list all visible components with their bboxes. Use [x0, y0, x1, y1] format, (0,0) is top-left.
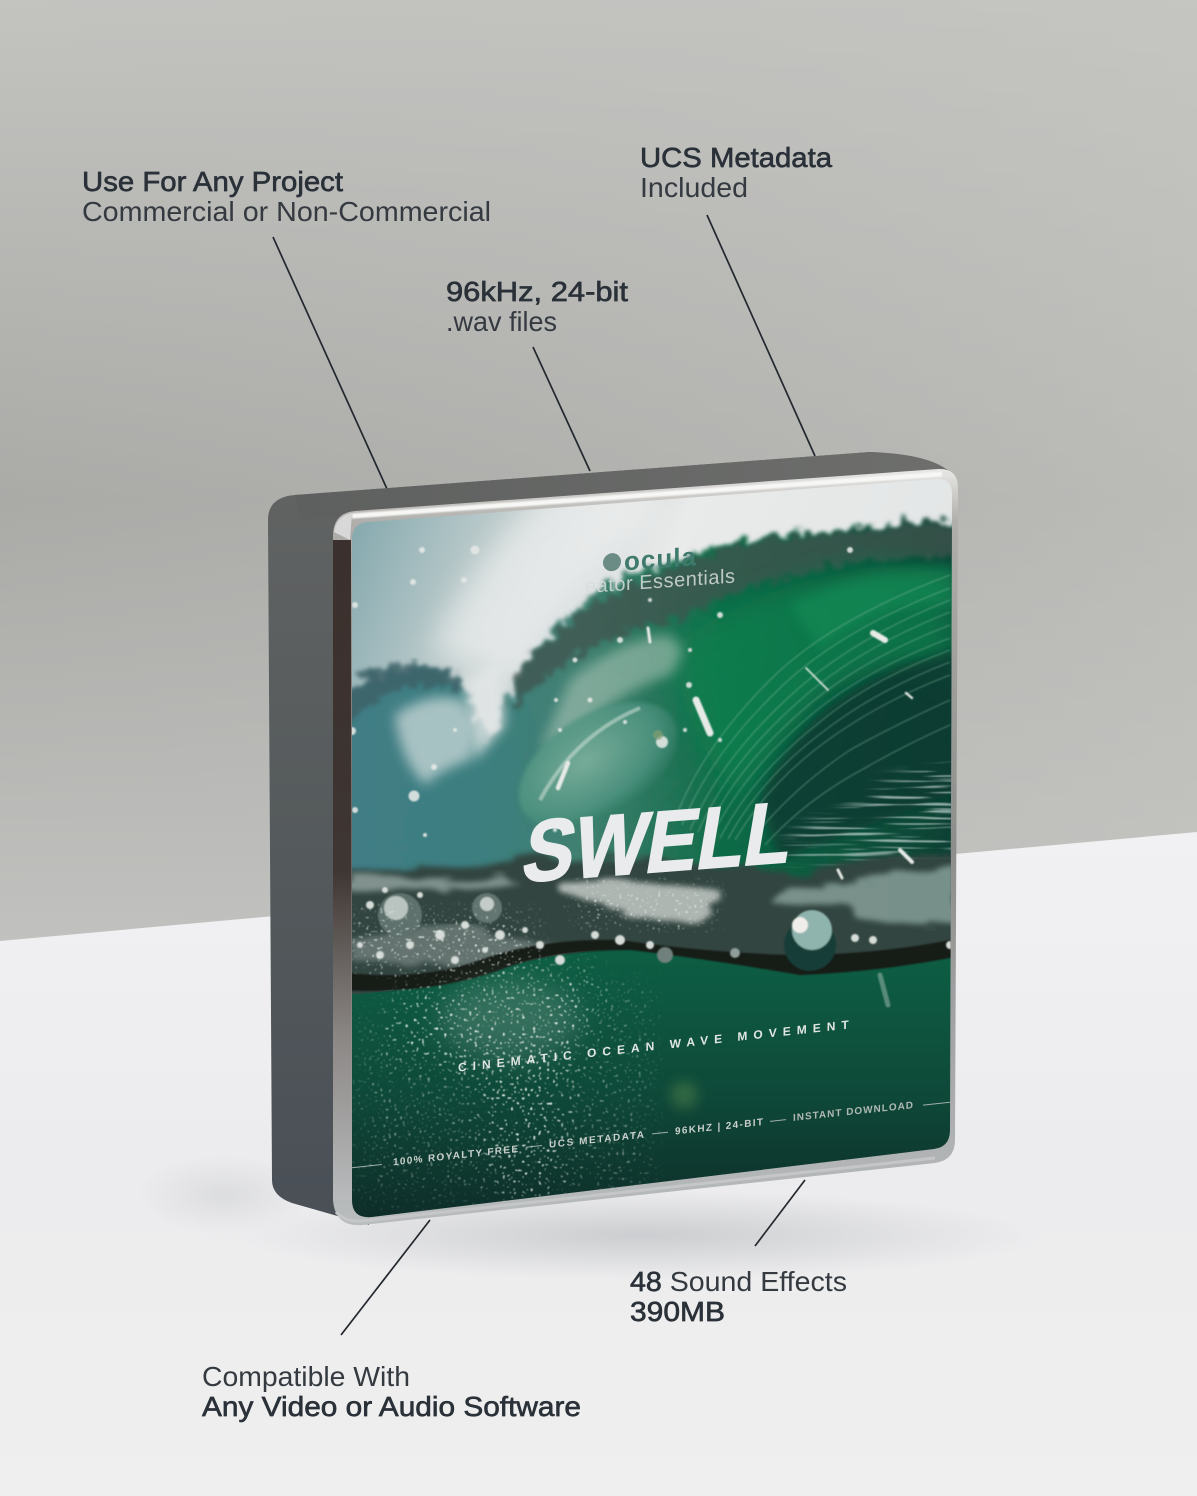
- SWELL title: SWELL: [516, 783, 801, 901]
- foam lip: [540, 635, 681, 750]
- barrel: [518, 702, 678, 822]
- dark swell fringe: [345, 664, 460, 725]
- feature strip: UCS METADATA: [549, 1130, 644, 1151]
- surface sparkle: [570, 880, 720, 930]
- surface bubbles: [357, 887, 954, 971]
- rippled water right: [778, 761, 952, 868]
- callout: use for any project: [82, 166, 491, 227]
- callout: audio format: .wav files: [446, 306, 557, 337]
- callout: compatibility: [202, 1361, 581, 1422]
- callout: audio format: 96kHz, 24-bit: [446, 276, 628, 307]
- left rim shade: [333, 540, 352, 1200]
- callout: use for any project: Use For Any Project: [82, 166, 343, 197]
- artwork: ocean wave: [340, 470, 960, 1230]
- lens glow: [670, 1081, 698, 1109]
- mist over distant swell: [395, 697, 474, 785]
- flying droplets: [348, 538, 853, 837]
- metal rim: [333, 469, 958, 1225]
- falling shards: [558, 628, 912, 1005]
- dark right face: [760, 650, 960, 860]
- bubble plume: [390, 965, 600, 1200]
- callout: compatibility: Compatible With: [202, 1361, 410, 1392]
- crest dark fringe: [510, 526, 960, 710]
- leader lines: [273, 215, 815, 1335]
- callout: UCS metadata: Included: [640, 172, 748, 203]
- wave streaks: [675, 575, 950, 845]
- feature strip: 96KHZ | 24-BIT: [675, 1117, 764, 1137]
- brand logo text: ocula: [624, 541, 697, 576]
- callout: audio format: [446, 276, 628, 337]
- callout: use for any project: Commercial or Non-Commercial: [82, 196, 491, 227]
- callout: compatibility: Any Video or Audio Software: [202, 1391, 581, 1422]
- wave and swell body: [340, 522, 960, 900]
- product box: [268, 452, 960, 1230]
- subtitle: CINEMATIC OCEAN WAVE MOVEMENT: [458, 1017, 854, 1075]
- box side and top: [268, 452, 950, 1225]
- underwater: [340, 948, 960, 1230]
- feature strip: 100% ROYALTY FREE: [393, 1144, 518, 1168]
- bright green face: [680, 565, 960, 800]
- feature strip: INSTANT DOWNLOAD: [793, 1100, 913, 1124]
- feature strip: [352, 1102, 950, 1168]
- callout: sound effects count: [630, 1266, 847, 1327]
- callout: UCS metadata: UCS Metadata: [640, 142, 832, 173]
- callout: sound effects count: 390MB: [630, 1296, 725, 1327]
- brand logo text: eator Essentials: [585, 566, 735, 598]
- sky: [352, 479, 952, 856]
- callout: UCS metadata: [640, 142, 832, 203]
- brand logo text: [587, 548, 734, 592]
- water surface: [340, 848, 960, 1000]
- callout: sound effects count: 48 Sound Effects: [630, 1266, 847, 1297]
- dark surface band: [340, 938, 960, 991]
